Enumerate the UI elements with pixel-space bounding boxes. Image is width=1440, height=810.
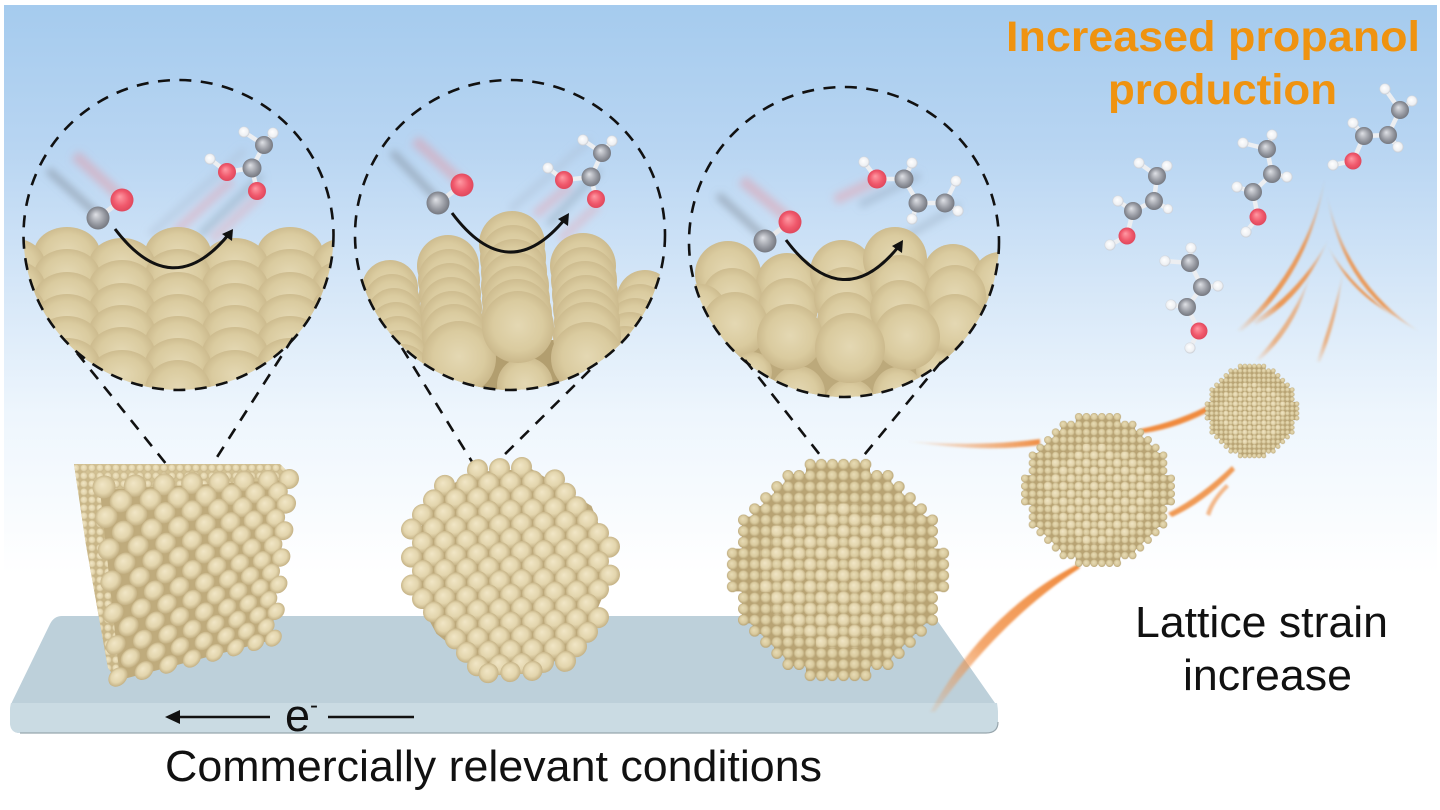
orange strain trails xyxy=(905,178,1420,712)
CO molecule xyxy=(754,210,802,252)
magnified circle 3: sphere surface xyxy=(688,86,1000,455)
background gradient xyxy=(4,5,1437,575)
dashed circle outline xyxy=(689,87,999,397)
C3 product molecule xyxy=(858,156,964,224)
copper atoms surface xyxy=(24,227,333,390)
dashed zoom lines xyxy=(402,348,590,465)
trail: long lower curve xyxy=(930,564,1080,712)
copper atoms surface xyxy=(363,211,660,390)
trail: outer left branch xyxy=(1236,178,1325,331)
electron flow arrow xyxy=(165,690,414,741)
label: lattice strain increase xyxy=(1135,598,1388,700)
label: lattice strain increase: Lattice strain xyxy=(1135,598,1388,647)
motion trails xyxy=(392,140,600,240)
dashed circle outline xyxy=(355,80,665,390)
dashed circle outline xyxy=(24,80,334,390)
heading: increased propanol production xyxy=(1006,13,1420,114)
nanoparticle: large sphere xyxy=(727,459,949,681)
electron flow arrow: e xyxy=(285,690,310,741)
trail: inner right branch xyxy=(1328,246,1397,318)
C2 product molecule xyxy=(542,134,618,208)
trail: outer right branch xyxy=(1327,195,1420,332)
motion trails xyxy=(718,175,960,240)
propanol molecule: left xyxy=(1104,158,1173,250)
motion trails xyxy=(48,150,262,240)
propanol molecule: top right xyxy=(1328,84,1418,170)
nanoparticle: medium sphere xyxy=(1021,413,1175,567)
platform: conductive substrate xyxy=(10,616,998,733)
electron flow arrow: - xyxy=(310,692,318,719)
label: lattice strain increase: increase xyxy=(1183,651,1352,700)
dashed zoom lines xyxy=(745,360,941,460)
trail: lower left branch xyxy=(1255,275,1310,361)
trail: lower centre branch xyxy=(1316,272,1343,362)
magnified circle 2: octahedral surface xyxy=(355,80,673,465)
reaction arrow xyxy=(452,213,569,252)
heading: increased propanol production: Increased propanol xyxy=(1006,13,1420,61)
nanoparticle: cube xyxy=(74,464,299,689)
trail: into medium particle from left xyxy=(905,439,1040,448)
copper atoms surface xyxy=(695,227,998,397)
dashed zoom lines xyxy=(77,338,293,465)
reaction arrow xyxy=(786,240,903,280)
CO molecule xyxy=(86,188,134,230)
caption: conditions: Commercially relevant conditions xyxy=(165,742,822,791)
propanol molecule: bottom xyxy=(1160,242,1224,354)
trail: inner left branch xyxy=(1252,240,1328,325)
C2 product molecule xyxy=(204,126,278,200)
nanoparticle: octahedron xyxy=(401,452,620,688)
propanol molecule: centre xyxy=(1232,130,1292,238)
reaction arrow xyxy=(115,229,233,268)
heading: increased propanol production: production xyxy=(1108,66,1337,114)
CO molecule xyxy=(426,174,474,214)
trail: hook under small particle xyxy=(1206,484,1229,516)
magnified circle 1: cube surface xyxy=(22,78,335,464)
nanoparticle: small sphere xyxy=(1205,364,1299,458)
trail: between particles lower xyxy=(1168,466,1235,517)
trail: between particles upper xyxy=(1140,402,1215,433)
